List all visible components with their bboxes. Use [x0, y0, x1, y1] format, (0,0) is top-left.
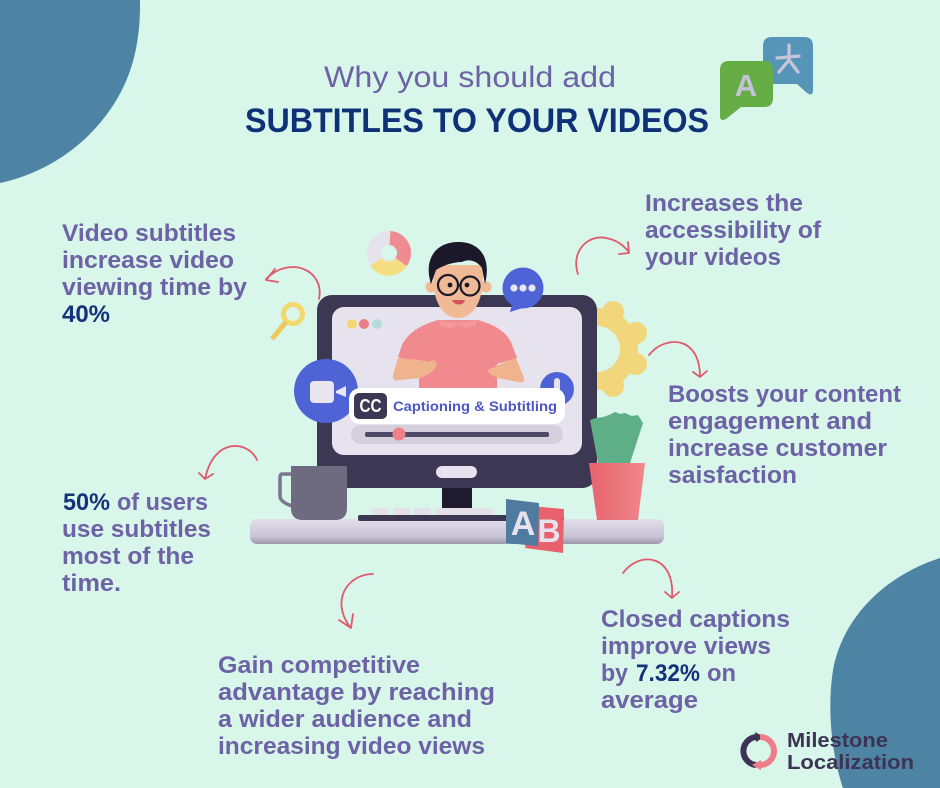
window dots: [347, 319, 382, 329]
corner blob: bottom right: [830, 558, 940, 788]
monitor screen: [332, 307, 582, 455]
title line two: SUBTITLES TO YOUR VIDEOS: [245, 102, 709, 140]
arrow: to competitive advantage text: [339, 574, 373, 628]
shirt: [398, 320, 517, 388]
text: competitive advantage: advantage by reaching: [218, 679, 495, 706]
head: [426, 265, 492, 318]
text: viewing time stat: Video subtitles: [62, 220, 236, 247]
corner blob: top left: [0, 0, 140, 183]
desk: [250, 519, 664, 544]
icon: translation speech bubbles: A: [735, 68, 757, 103]
text: closed captions stat: by: [601, 660, 629, 687]
caption banner: [349, 388, 565, 424]
logo: [743, 730, 914, 774]
video camera icon: [294, 359, 358, 423]
text: closed captions stat: 7.32%: [636, 660, 700, 687]
text: closed captions stat: Closed captions: [601, 606, 790, 633]
person: [393, 242, 524, 388]
banner text: Captioning & Subtitling: [393, 398, 557, 414]
plant: [589, 412, 645, 520]
arms and hands: [393, 358, 524, 382]
icon: translation speech bubbles: [720, 37, 813, 120]
eyes: [448, 283, 469, 287]
text: viewing time stat: viewing time by: [62, 274, 248, 301]
text: competitive advantage: increasing video views: [218, 733, 485, 760]
arrow: to viewing time text: [266, 267, 320, 299]
text: users stat: most of the: [62, 543, 194, 570]
text: users stat: 50%: [63, 489, 110, 516]
arrow: to engagement text: [649, 342, 707, 377]
text: users stat: time.: [62, 570, 121, 597]
monitor button: [436, 466, 477, 478]
microphone icon: [540, 372, 574, 406]
text: viewing time stat: increase video: [62, 247, 234, 274]
text: engagement: saisfaction: [668, 462, 797, 489]
arrow: to closed captions text: [623, 559, 679, 598]
monitor stand: [442, 486, 472, 512]
text: closed captions stat: average: [601, 687, 698, 714]
pot: [589, 463, 645, 520]
title line one: Why you should add: [324, 61, 616, 94]
keyboard: [358, 508, 564, 521]
text: users stat: use subtitles: [62, 516, 211, 543]
text: accessibility: accessibility of: [645, 217, 822, 244]
text: users stat: [62, 489, 211, 597]
glasses: [438, 275, 480, 296]
illustration: computer on desk: [250, 242, 664, 553]
logo mark: [743, 732, 774, 770]
monitor frame: [317, 295, 597, 488]
text: competitive advantage: [218, 652, 495, 760]
text: viewing time stat: [62, 220, 248, 328]
text: viewing time stat: 40%: [62, 301, 110, 328]
logo wordmark: Milestone: [787, 730, 888, 752]
title: [245, 61, 709, 140]
text: competitive advantage: a wider audience and: [218, 706, 472, 733]
text: accessibility: Increases the: [645, 190, 803, 217]
icon: gear: [556, 301, 647, 397]
A tile: A: [511, 505, 535, 543]
text: engagement: [668, 381, 901, 489]
arrow: to users text: [199, 446, 257, 479]
CC badge: [354, 393, 387, 419]
speech bubble icon: [502, 268, 544, 312]
hair: [429, 242, 487, 284]
text: users stat: of users: [117, 489, 208, 516]
text: closed captions stat: [601, 606, 790, 714]
mouth: [452, 300, 465, 304]
text: engagement: engagement and: [668, 408, 872, 435]
text: engagement: Boosts your content: [668, 381, 901, 408]
logo: Localization: [787, 752, 914, 774]
text: accessibility: [645, 190, 822, 271]
text: engagement: increase customer: [668, 435, 887, 462]
text: accessibility: your videos: [645, 244, 781, 271]
arrow: to accessibility text: [576, 237, 629, 274]
B tile: B: [537, 513, 561, 549]
mug: [280, 466, 347, 520]
text: closed captions stat: improve views: [601, 633, 771, 660]
icon: magnifying glass: [272, 304, 302, 339]
letter blocks: [506, 499, 564, 553]
caption banner: CC: [360, 396, 382, 416]
text: competitive advantage: Gain competitive: [218, 652, 420, 679]
collar: [439, 320, 477, 329]
icon: donut chart: [374, 238, 404, 269]
progress bar: [351, 425, 563, 444]
leaves: [590, 412, 643, 463]
text: closed captions stat: on: [707, 660, 736, 687]
